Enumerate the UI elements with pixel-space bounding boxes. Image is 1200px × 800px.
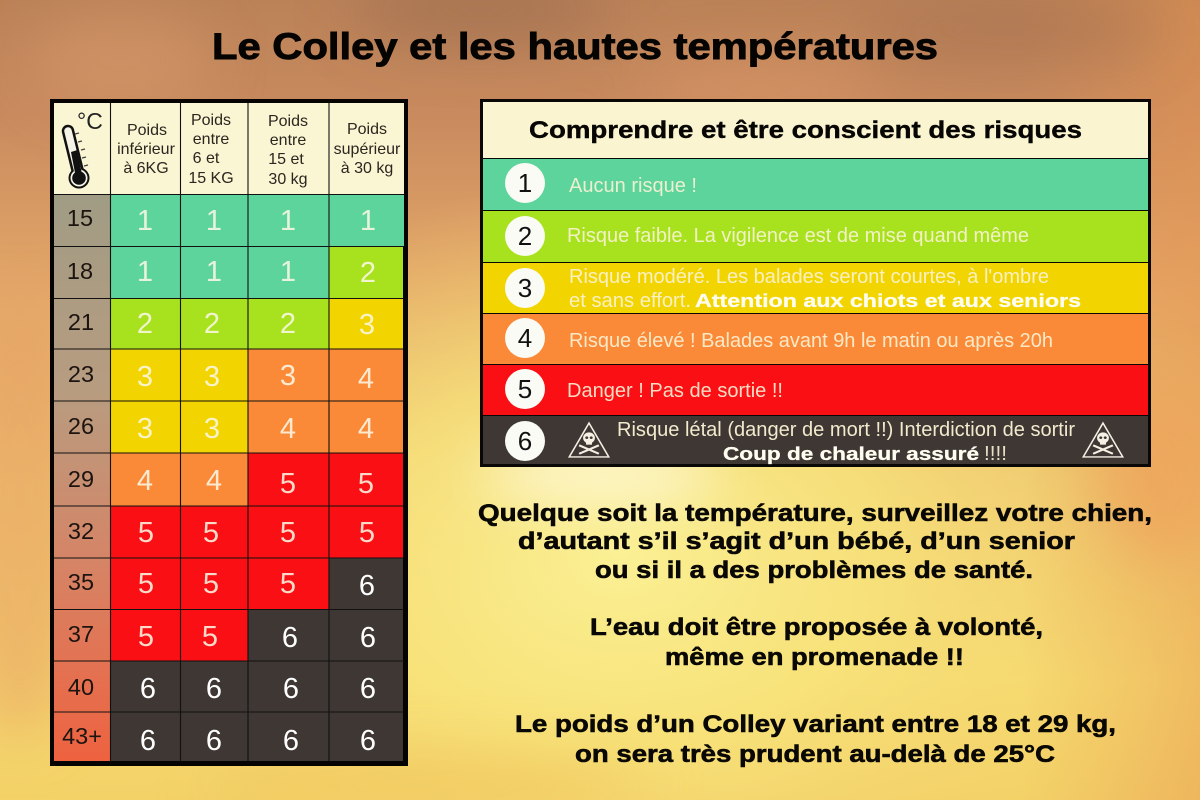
risk values: 6 <box>283 725 299 757</box>
column heading: 6 to 15 kg: 15 KG <box>188 170 234 187</box>
risk values: 5 <box>138 568 154 600</box>
risk values: 4 <box>358 363 374 395</box>
temperature column: 37 <box>68 621 94 647</box>
temperature column: 23 <box>68 361 94 387</box>
risk 6: Risque létal (danger de mort !!) Interdiction de sortir <box>617 419 1075 441</box>
risk 5: Danger ! Pas de sortie !! <box>567 380 783 402</box>
temperature column: 26 <box>68 413 94 439</box>
risk values: 3 <box>137 413 153 445</box>
icon: thermometer <box>68 108 103 188</box>
risk values: 6 <box>360 673 376 705</box>
grid lines <box>54 103 404 761</box>
table header row <box>54 103 404 194</box>
panel: risk legend <box>480 99 1151 467</box>
risk values: 4 <box>358 413 374 445</box>
risk values: 6 <box>360 622 376 654</box>
temperature column: 29 <box>68 466 94 492</box>
text block: colley weight advice: on sera très prudent au-delà de 25°C <box>575 741 1055 768</box>
risk 3: Attention aux chiots et aux seniors <box>695 290 1081 311</box>
risk values: 3 <box>204 413 220 445</box>
temperature column: 15 <box>67 205 93 231</box>
risk values: 5 <box>138 517 154 549</box>
icon: skull warning left <box>569 423 609 457</box>
risk 6: !!!! <box>984 443 1007 465</box>
column heading: 6 to 15 kg: 6 et <box>193 150 220 167</box>
risk 3: et sans effort. <box>569 290 691 312</box>
risk values: 1 <box>137 205 153 237</box>
risk values: 5 <box>202 621 218 653</box>
temperature column: 32 <box>68 518 94 544</box>
risk values <box>137 205 376 757</box>
text block: surveillance advice <box>478 500 1152 584</box>
legend heading <box>483 102 1148 158</box>
risk values: 6 <box>360 725 376 757</box>
risk 3: Risque modéré. Les balades seront courtes, à l'ombre <box>569 266 1049 288</box>
title: Le Colley et les hautes températures <box>212 26 938 67</box>
risk values: 5 <box>280 468 296 500</box>
risk values: 6 <box>140 725 156 757</box>
risk 4 <box>483 314 1148 364</box>
temperature column: 40 <box>68 674 94 700</box>
risk 6: 6 <box>518 426 532 456</box>
risk values: 6 <box>206 673 222 705</box>
risk 2 <box>483 211 1148 262</box>
text block: surveillance advice: d’autant s’il s’agit d’un bébé, d’un senior <box>518 528 1076 555</box>
temperature column: 43+ <box>62 723 102 749</box>
risk values: 5 <box>359 517 375 549</box>
risk values: 6 <box>283 673 299 705</box>
panel: temperature table <box>50 99 408 766</box>
risk values: 3 <box>280 360 296 392</box>
risk 1: 1 <box>518 168 532 198</box>
risk 4: 4 <box>518 323 532 353</box>
risk values: 1 <box>280 256 296 288</box>
column heading: over 30 kg: à 30 kg <box>341 160 393 177</box>
risk 3: 3 <box>518 273 532 303</box>
risk 5 <box>483 365 1148 415</box>
risk 2: Risque faible. La vigilence est de mise quand même <box>567 225 1029 247</box>
column heading: under 6 kg: à 6KG <box>123 160 169 177</box>
column heading: 15 to 30 kg: Poids <box>268 113 308 130</box>
risk 3 <box>483 263 1148 313</box>
risk values: 6 <box>140 673 156 705</box>
risk values: 4 <box>280 413 296 445</box>
column heading: 6 to 15 kg: entre <box>193 131 229 148</box>
risk 1: Aucun risque ! <box>569 175 697 197</box>
risk values: 5 <box>358 468 374 500</box>
risk cells <box>110 194 404 761</box>
risk 1 <box>483 159 1148 210</box>
icon: thermometer: °C <box>77 108 103 134</box>
risk values: 2 <box>204 308 220 340</box>
text block: water advice: même en promenade !! <box>665 644 964 671</box>
column heading: 15 to 30 kg: entre <box>270 132 306 149</box>
text block: surveillance advice: ou si il a des problèmes de santé. <box>595 557 1033 584</box>
risk values: 1 <box>280 205 296 237</box>
risk values: 1 <box>137 256 153 288</box>
risk 6: Coup de chaleur assuré <box>723 443 979 464</box>
text block: colley weight advice <box>515 711 1116 768</box>
risk values: 2 <box>137 308 153 340</box>
risk 6 <box>483 416 1148 465</box>
temperature column: 35 <box>68 569 94 595</box>
risk values: 1 <box>360 205 376 237</box>
column heading: 15 to 30 kg: 30 kg <box>268 171 308 188</box>
column heading: under 6 kg: Poids <box>127 122 167 139</box>
risk 5: 5 <box>518 374 532 404</box>
column heading: 15 to 30 kg: 15 et <box>268 151 304 168</box>
risk values: 2 <box>280 308 296 340</box>
legend heading: Comprendre et être conscient des risques <box>529 117 1082 144</box>
risk values: 4 <box>137 465 153 497</box>
risk values: 5 <box>138 621 154 653</box>
risk values: 2 <box>360 257 376 289</box>
risk values: 5 <box>203 517 219 549</box>
risk values: 4 <box>206 465 222 497</box>
temperature column: 18 <box>67 258 93 284</box>
risk values: 3 <box>204 361 220 393</box>
temperature column <box>54 194 110 761</box>
risk values: 1 <box>206 256 222 288</box>
risk 2: 2 <box>518 221 532 251</box>
text block: colley weight advice: Le poids d’un Colley variant entre 18 et 29 kg, <box>515 711 1116 738</box>
risk values: 3 <box>137 361 153 393</box>
risk 4: Risque élevé ! Balades avant 9h le matin ou après 20h <box>569 330 1053 352</box>
icon: skull warning right <box>1083 423 1123 457</box>
risk values: 5 <box>280 517 296 549</box>
column heading: under 6 kg: inférieur <box>117 141 176 158</box>
risk values: 5 <box>203 568 219 600</box>
risk values: 5 <box>280 568 296 600</box>
column heading: over 30 kg: Poids <box>347 121 387 138</box>
column heading: over 30 kg: supérieur <box>334 141 401 158</box>
risk values: 6 <box>206 725 222 757</box>
column heading: 6 to 15 kg: Poids <box>191 112 231 129</box>
temperature column: 21 <box>68 309 94 335</box>
risk values: 3 <box>359 309 375 341</box>
text block: water advice: L’eau doit être proposée à volonté, <box>590 614 1043 641</box>
text block: surveillance advice: Quelque soit la température, surveillez votre chien, <box>478 500 1152 527</box>
risk values: 6 <box>282 622 298 654</box>
risk values: 6 <box>359 570 375 602</box>
risk values: 1 <box>206 205 222 237</box>
text block: water advice <box>590 614 1043 671</box>
